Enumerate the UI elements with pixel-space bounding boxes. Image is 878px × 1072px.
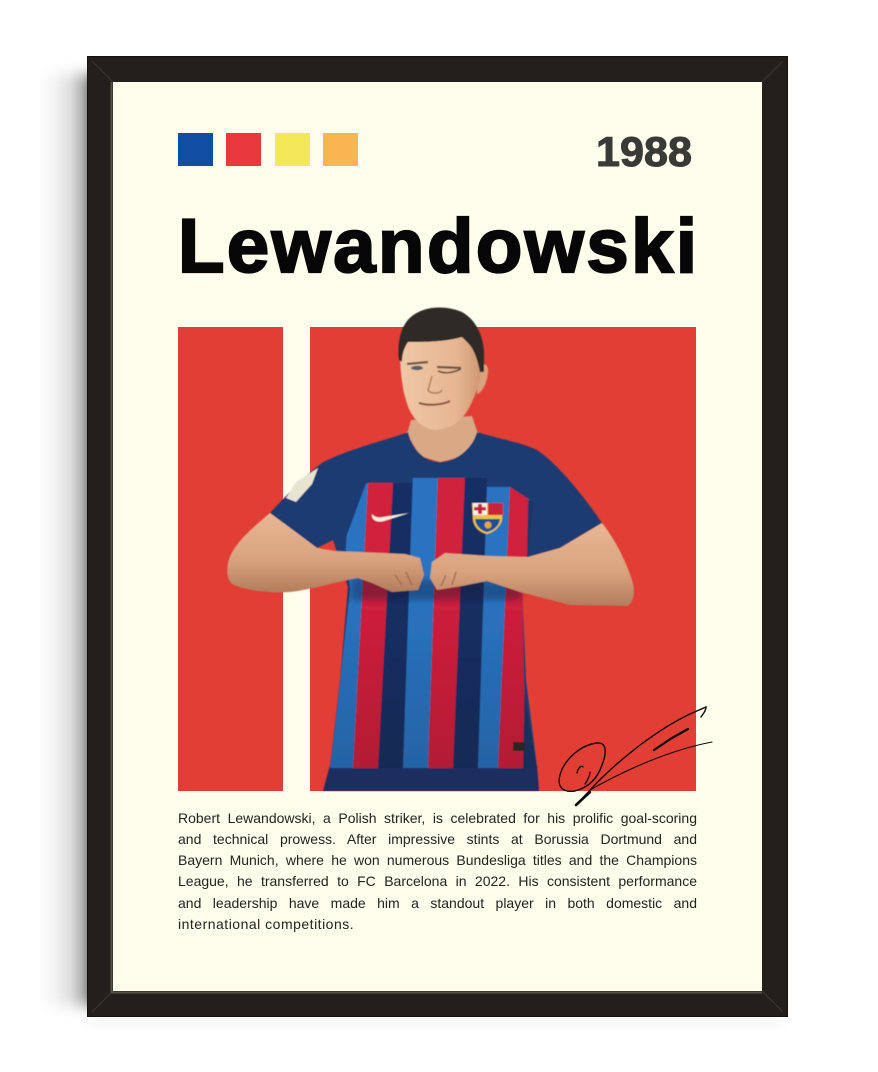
picture frame xyxy=(87,56,788,1017)
biography text block: Bayern Munich, where he won numerous Bundesliga titles and the Champions xyxy=(178,852,697,868)
white collar edge xyxy=(407,432,478,455)
ear xyxy=(477,364,488,394)
eyebrows and eyes xyxy=(407,362,428,364)
face xyxy=(400,330,482,430)
fist creases xyxy=(395,572,456,586)
neck xyxy=(407,416,478,462)
right arm xyxy=(430,523,634,606)
jersey stripes xyxy=(325,473,545,768)
nose xyxy=(428,376,442,393)
year: 1988 xyxy=(596,128,692,175)
colour palette swatches xyxy=(178,133,358,166)
biography text block: and leadership have made him a standout player in both domestic and xyxy=(178,894,697,910)
mouth xyxy=(419,401,450,405)
club crest xyxy=(472,503,503,534)
biography text block: international competitions. xyxy=(178,916,354,932)
left arm xyxy=(227,513,424,592)
biography text block: Robert Lewandowski, a Polish striker, is celebrated for his prolific goal-scoring xyxy=(178,810,697,826)
title: Lewandowski xyxy=(178,204,697,289)
shorts xyxy=(323,765,539,791)
shadow under fists xyxy=(350,578,522,600)
red panel: right xyxy=(310,327,696,791)
frame drop shadow xyxy=(38,74,780,1024)
sleeve patch xyxy=(286,468,318,502)
hair xyxy=(398,307,484,372)
player illustration xyxy=(227,307,634,791)
biography text block xyxy=(178,810,697,932)
biography text block: League, he transferred to FC Barcelona in 2022. His consistent performance xyxy=(178,873,697,889)
nike swoosh xyxy=(372,513,409,522)
shirt body xyxy=(270,432,602,767)
signature xyxy=(559,707,712,805)
jersey tag xyxy=(513,742,525,751)
red panel: left xyxy=(178,327,283,791)
biography text block: and technical prowess. After impressive stints at Borussia Dortmund and xyxy=(178,831,697,847)
poster paper xyxy=(113,82,762,991)
